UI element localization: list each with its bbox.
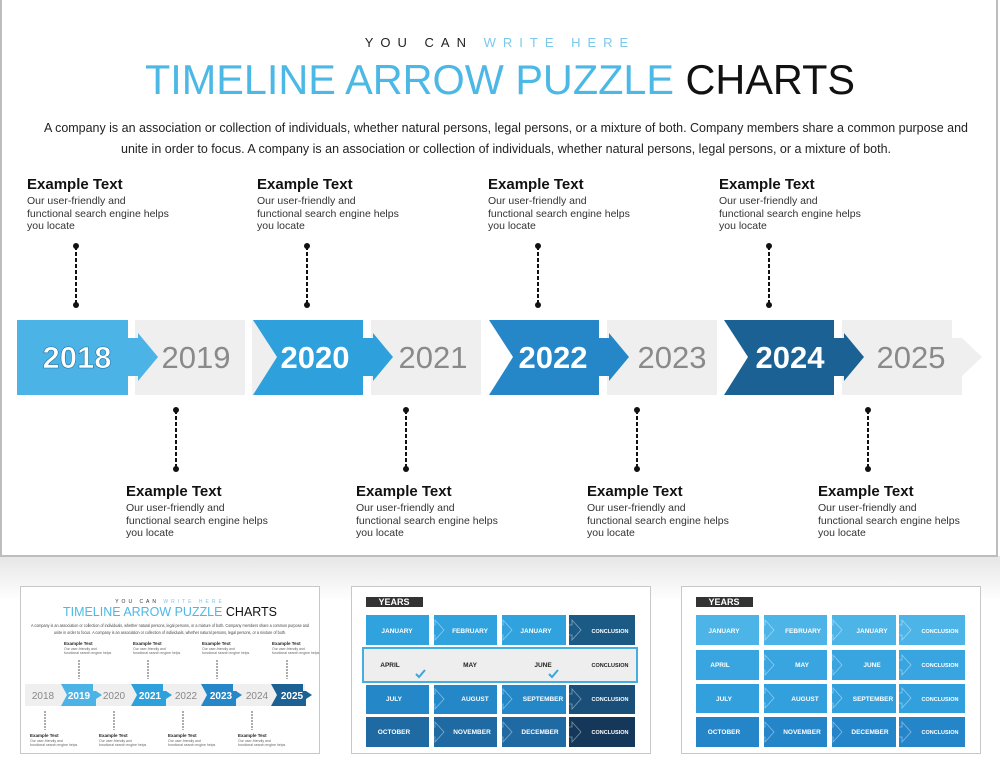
thumbnail 2: months grid highlighted: CONCLUSION — [592, 629, 629, 635]
thumbnail 3: months grid blue: OCTOBER — [708, 729, 740, 736]
thumbnail 2: months grid highlighted: CONCLUSION — [592, 730, 629, 736]
callouts bottom: Our user-friendly and — [356, 502, 455, 514]
callouts bottom: Example Text — [356, 483, 452, 500]
callouts top: functional search engine helps — [719, 208, 861, 220]
callouts top: Example Text — [488, 176, 584, 193]
thumbnail 1: timeline: unite in order to focus. A company is an association or collection of individuals, whether natural persons, legal persons, or a mixture of both. — [54, 630, 286, 635]
callouts bottom: functional search engine helps — [356, 515, 498, 527]
callouts bottom: functional search engine helps — [818, 515, 960, 527]
timeline arrows: 2019 — [162, 340, 230, 375]
thumbnail 1: timeline: Example Text — [238, 733, 267, 738]
thumbnail 2: months grid highlighted — [352, 586, 650, 754]
thumbnail 3: months grid blue: SEPTEMBER — [853, 696, 894, 703]
intro paragraph: A company is an association or collection of individuals, whether natural persons, legal persons, or a mixture of both. Company members share a common purpose and — [44, 120, 968, 135]
timeline arrows: 2021 — [399, 340, 467, 375]
thumbnail 1: timeline: Our user-friendly and — [272, 647, 305, 651]
thumbnail 3: months grid blue: FEBRUARY — [785, 628, 822, 635]
timeline arrows: 2025 — [877, 340, 945, 375]
thumbnail 2: months grid highlighted: APRIL — [380, 662, 400, 669]
callouts top: functional search engine helps — [257, 208, 399, 220]
thumbnail 1: timeline: Example Text — [272, 641, 301, 646]
timeline arrows — [17, 320, 982, 395]
thumbnail 1: timeline: Example Text — [168, 733, 197, 738]
thumbnail 1: timeline: functional search engine helps — [238, 743, 286, 747]
thumbnail 1: timeline: Our user-friendly and — [133, 647, 166, 651]
thumbnail 3: months grid blue: AUGUST — [791, 696, 819, 703]
thumbnail 2: months grid highlighted: YEARS — [378, 597, 410, 607]
callouts bottom: you locate — [818, 527, 866, 539]
thumbnail 1: timeline: 2024 — [246, 691, 269, 702]
timeline arrows: 2022 — [519, 340, 587, 375]
callouts top — [27, 176, 861, 232]
panel: main slide — [1, 0, 997, 556]
thumbnail 3: months grid blue: JANUARY — [856, 628, 888, 635]
callouts top: you locate — [257, 220, 305, 232]
thumbnail 1: timeline: functional search engine helps — [64, 651, 112, 655]
timeline arrows: 2023 — [638, 340, 706, 375]
thumbnail 1: timeline: Example Text — [30, 733, 59, 738]
thumbnail 3: months grid blue: YEARS — [708, 597, 740, 607]
thumbnail 1: timeline: 2025 — [281, 691, 304, 702]
thumbnail 1: timeline: functional search engine helps — [99, 743, 147, 747]
thumbnail 1: timeline: functional search engine helps — [30, 743, 78, 747]
thumbnail 1: timeline: Our user-friendly and — [30, 739, 63, 743]
title: TIMELINE ARROW PUZZLE CHARTS — [145, 56, 855, 103]
thumbnail 2: months grid highlighted: CONCLUSION — [592, 663, 629, 669]
callouts top: Example Text — [719, 176, 815, 193]
thumbnail 1: timeline: Example Text — [133, 641, 162, 646]
thumbnail 3: months grid blue: MAY — [795, 662, 810, 669]
thumbnail 3: months grid blue: JANUARY — [708, 628, 740, 635]
thumbnail 1: timeline: A company is an association or collection of individuals, whether natural persons, legal persons, or a mixture of both. Company members share a common purpose and — [31, 623, 309, 628]
callouts bottom: Our user-friendly and — [818, 502, 917, 514]
thumbnail 1: timeline: 2020 — [103, 691, 126, 702]
thumbnail 1: timeline: TIMELINE ARROW PUZZLE CHARTS — [63, 604, 277, 619]
thumbnail 3: months grid blue: CONCLUSION — [922, 730, 959, 736]
callouts top: Our user-friendly and — [257, 195, 356, 207]
timeline arrows: 2024 — [756, 340, 825, 375]
callouts top: Our user-friendly and — [27, 195, 126, 207]
callouts top: you locate — [27, 220, 75, 232]
callouts bottom: functional search engine helps — [126, 515, 268, 527]
intro paragraph: unite in order to focus. A company is an association or collection of individuals, whether natural persons, legal persons, or a mixture of both. — [121, 141, 891, 156]
callouts bottom: Example Text — [587, 483, 683, 500]
timeline arrows: 2018 — [43, 340, 111, 375]
callouts top: Our user-friendly and — [719, 195, 818, 207]
thumbnail 1: timeline: YOU CAN WRITE HERE — [115, 599, 225, 605]
thumbnail 3: months grid blue: CONCLUSION — [922, 629, 959, 635]
thumbnail 1: timeline — [20, 586, 320, 754]
thumbnail 2: months grid highlighted: NOVEMBER — [453, 729, 491, 736]
callouts bottom: functional search engine helps — [587, 515, 729, 527]
thumbnail 2: months grid highlighted: SEPTEMBER — [523, 696, 564, 703]
thumbnail 2: months grid highlighted: JANUARY — [381, 628, 413, 635]
callouts bottom: you locate — [587, 527, 635, 539]
thumbnail 1: timeline: Example Text — [64, 641, 93, 646]
thumbnail 2: months grid highlighted: MAY — [463, 662, 478, 669]
callouts bottom: you locate — [356, 527, 404, 539]
thumbnail 3: months grid blue: NOVEMBER — [783, 729, 821, 736]
thumbnail 1: timeline: 2023 — [210, 691, 233, 702]
thumbnail 1: timeline: functional search engine helps — [202, 651, 250, 655]
thumbnail 1: timeline: 2021 — [139, 691, 162, 702]
thumbnail 3: months grid blue: CONCLUSION — [922, 663, 959, 669]
thumbnail 2: months grid highlighted: JUNE — [534, 662, 552, 669]
callouts bottom: you locate — [126, 527, 174, 539]
callouts bottom: Example Text — [818, 483, 914, 500]
thumbnail 3: months grid blue: DECEMBER — [851, 729, 889, 736]
thumbnail 3: months grid blue — [682, 586, 980, 754]
thumbnail 2: months grid highlighted: DECEMBER — [521, 729, 559, 736]
thumbnail 1: timeline: Our user-friendly and — [168, 739, 201, 743]
thumbnail 3: months grid blue: JUNE — [863, 662, 881, 669]
thumbnail 3: months grid blue: CONCLUSION — [922, 697, 959, 703]
callouts bottom: Our user-friendly and — [126, 502, 225, 514]
callouts bottom: Example Text — [126, 483, 222, 500]
thumbnail 2: months grid highlighted: JULY — [386, 696, 403, 703]
callouts bottom — [126, 483, 960, 539]
callouts top: Example Text — [27, 176, 123, 193]
thumbnail 1: timeline: 2018 — [32, 691, 55, 702]
callouts top: functional search engine helps — [27, 208, 169, 220]
thumbnail 1: timeline: functional search engine helps — [133, 651, 181, 655]
thumbnail 1: timeline: 2022 — [175, 691, 198, 702]
thumbnail 1: timeline: Our user-friendly and — [99, 739, 132, 743]
callouts top: Our user-friendly and — [488, 195, 587, 207]
intro paragraph — [44, 120, 968, 156]
thumbnail 1: timeline: Example Text — [202, 641, 231, 646]
thumbnail 2: months grid highlighted: CONCLUSION — [592, 697, 629, 703]
callouts bottom: Our user-friendly and — [587, 502, 686, 514]
thumbnail 1: timeline: functional search engine helps — [272, 651, 320, 655]
thumbnail 2: months grid highlighted: FEBRUARY — [452, 628, 489, 635]
thumbnail 3: months grid blue: APRIL — [710, 662, 730, 669]
thumbnail 1: timeline: functional search engine helps — [168, 743, 216, 747]
callouts top: functional search engine helps — [488, 208, 630, 220]
callouts top: Example Text — [257, 176, 353, 193]
callouts top: you locate — [488, 220, 536, 232]
thumbnail 2: months grid highlighted: AUGUST — [461, 696, 489, 703]
thumbnail 1: timeline: Example Text — [99, 733, 128, 738]
thumbnail 2: months grid highlighted: JANUARY — [520, 628, 552, 635]
subtitle: YOU CAN WRITE HERE — [365, 35, 635, 50]
thumbnail 3: months grid blue: JULY — [716, 696, 733, 703]
timeline arrows: 2020 — [281, 340, 349, 375]
thumbnail 1: timeline: Our user-friendly and — [238, 739, 271, 743]
thumbnail 1: timeline: Our user-friendly and — [64, 647, 97, 651]
thumbnail 1: timeline: Our user-friendly and — [202, 647, 235, 651]
callouts top: you locate — [719, 220, 767, 232]
thumbnail 1: timeline: 2019 — [68, 691, 91, 702]
thumbnail 2: months grid highlighted: OCTOBER — [378, 729, 410, 736]
connectors — [73, 243, 871, 472]
